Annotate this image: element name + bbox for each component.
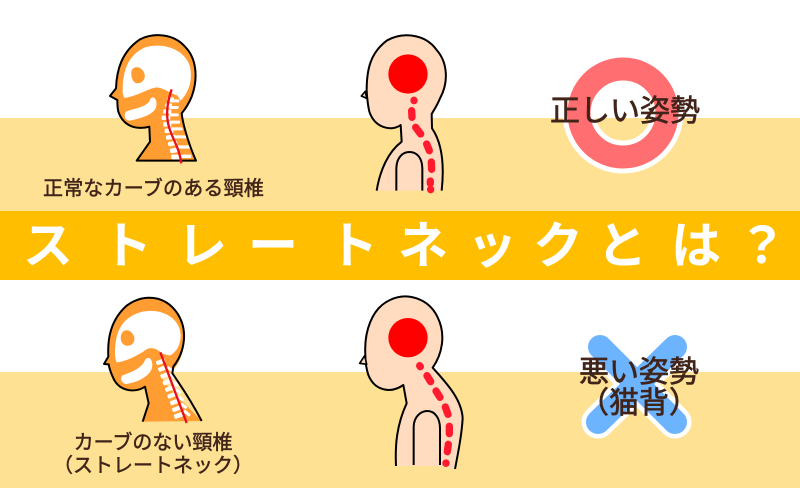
skeleton head: straight neck xyxy=(104,298,202,423)
label: neck without curve: カーブのない頸椎 xyxy=(74,432,232,454)
heading: correct posture: 正しい姿勢 xyxy=(550,95,700,128)
skeleton head: normal curve xyxy=(110,35,196,163)
label: neck without curve: （ストレートネック） xyxy=(53,455,253,477)
body head: normal posture with red pain marks xyxy=(361,35,446,191)
body head: rounded back with red pain marks xyxy=(360,296,463,469)
label: normal curve cervical spine: 正常なカーブのある頸椎 xyxy=(43,178,264,200)
status mark: wrong cross xyxy=(598,347,675,422)
heading: bad posture hunched back: （猫背） xyxy=(579,387,699,420)
banner: what is straight neck: ストレートネックとは？ xyxy=(23,218,787,274)
heading: bad posture hunched back: 悪い姿勢 xyxy=(579,356,699,389)
status mark: correct circle xyxy=(579,69,667,157)
label: neck without curve xyxy=(53,431,253,477)
heading: bad posture hunched back xyxy=(579,356,699,420)
